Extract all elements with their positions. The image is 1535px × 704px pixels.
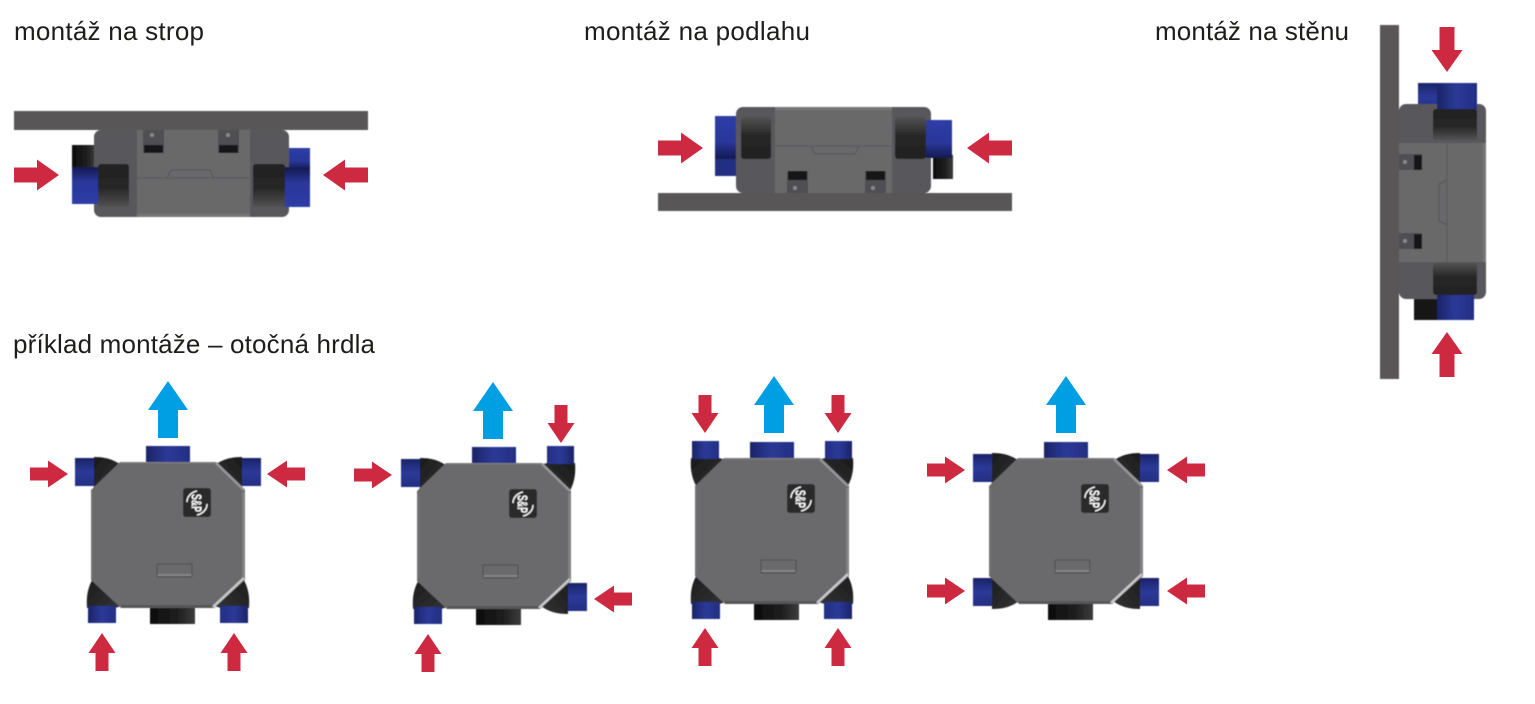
arrows: example 1 xyxy=(30,381,305,671)
arrows: example 2 xyxy=(354,382,632,672)
arrows: floor mount xyxy=(658,132,1012,164)
rotating outlets example 4 xyxy=(973,442,1159,620)
floor slab xyxy=(658,193,1012,211)
arrows: example 4 xyxy=(927,376,1205,604)
wall slab xyxy=(1380,25,1399,379)
rotating outlets example 1 xyxy=(75,446,261,624)
heading: montáž na podlahu: montáž na podlahu xyxy=(584,16,810,46)
arrows: wall mount xyxy=(1432,27,1462,377)
heading: montáž na strop: montáž na strop xyxy=(14,16,204,46)
arrows: example 3 xyxy=(692,376,852,666)
arrows: ceiling mount xyxy=(14,160,368,190)
rotating outlets example 3 xyxy=(691,441,853,620)
ceiling slab xyxy=(14,111,368,130)
heading: příklad montáže – otočná hrdla: příklad montáže – otočná hrdla xyxy=(13,329,376,359)
rotating outlets example 2 xyxy=(401,446,587,625)
floor mount unit xyxy=(658,107,1012,211)
wall mount unit xyxy=(1380,25,1486,379)
ceiling mount unit xyxy=(14,111,368,217)
heading: montáž na stěnu: montáž na stěnu xyxy=(1155,16,1349,46)
